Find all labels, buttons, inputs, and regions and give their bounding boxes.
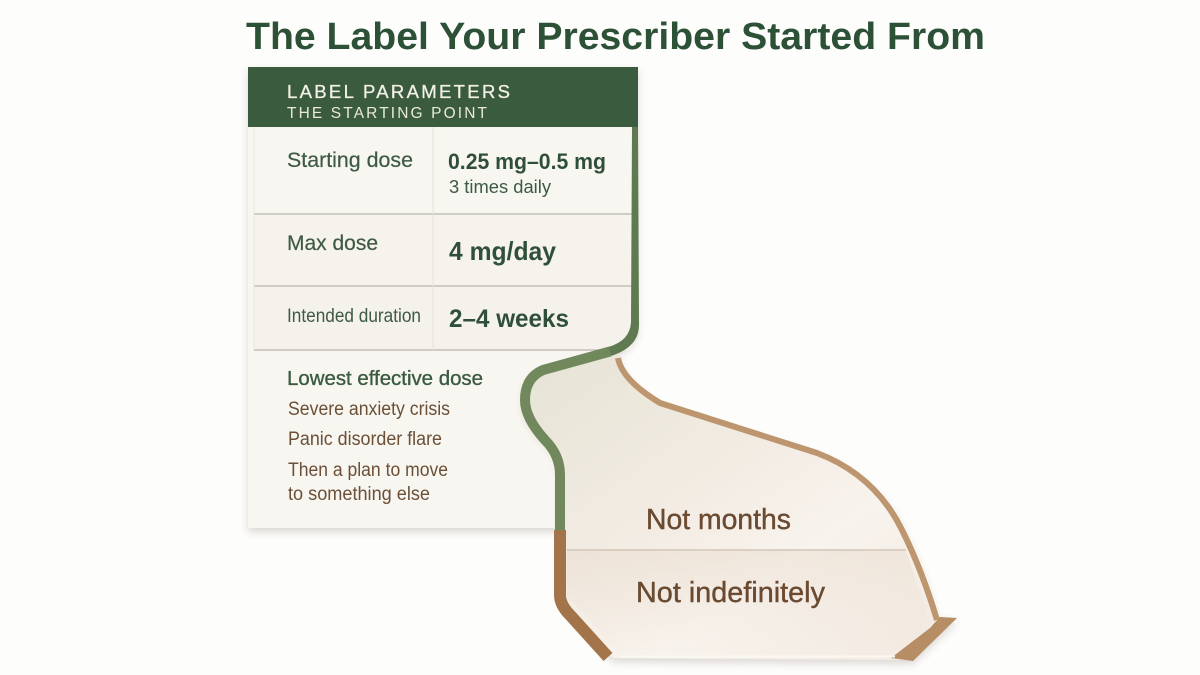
bottom edge: [620, 656, 895, 658]
card header: LABEL PARAMETERS: [287, 81, 510, 102]
row: intended duration: 2–4 weeks: [449, 305, 569, 333]
green edge upper: [608, 127, 639, 356]
notes text: Severe anxiety crisis: [288, 399, 450, 420]
notes text: [287, 367, 483, 505]
notes text: Lowest effective dose: [287, 367, 483, 390]
row: starting dose: Starting dose: [287, 149, 413, 172]
row: max dose: 4 mg/day: [449, 236, 557, 266]
title: The Label Your Prescriber Started From: [246, 16, 985, 58]
table lines: [254, 214, 632, 350]
notes text: Panic disorder flare: [288, 429, 442, 450]
panel: taper shape: [523, 127, 957, 661]
card header: THE STARTING POINT: [287, 105, 488, 122]
not months label: Not months: [646, 504, 791, 536]
row: starting dose: 3 times daily: [449, 177, 551, 197]
row: max dose: [254, 215, 632, 286]
row: starting dose: [254, 127, 632, 214]
row: max dose: Max dose: [287, 232, 378, 255]
card header: [248, 67, 638, 127]
brown edge: [560, 530, 608, 657]
card paper: [248, 67, 638, 528]
notes text: Then a plan to move: [288, 460, 448, 481]
taper fill: [523, 352, 957, 660]
not indefinitely label: Not indefinitely: [636, 577, 825, 609]
row: starting dose: 0.25 mg–0.5 mg: [448, 149, 606, 174]
tan top edge: [618, 358, 937, 620]
row: intended duration: [254, 287, 632, 350]
divider: [567, 549, 906, 551]
lower band tint: [567, 551, 930, 656]
foot: [891, 617, 957, 661]
notes text: to something else: [288, 484, 430, 505]
green edge curve: [525, 352, 610, 530]
panel: label parameters card: [248, 67, 638, 528]
row: intended duration: Intended duration: [287, 306, 421, 327]
